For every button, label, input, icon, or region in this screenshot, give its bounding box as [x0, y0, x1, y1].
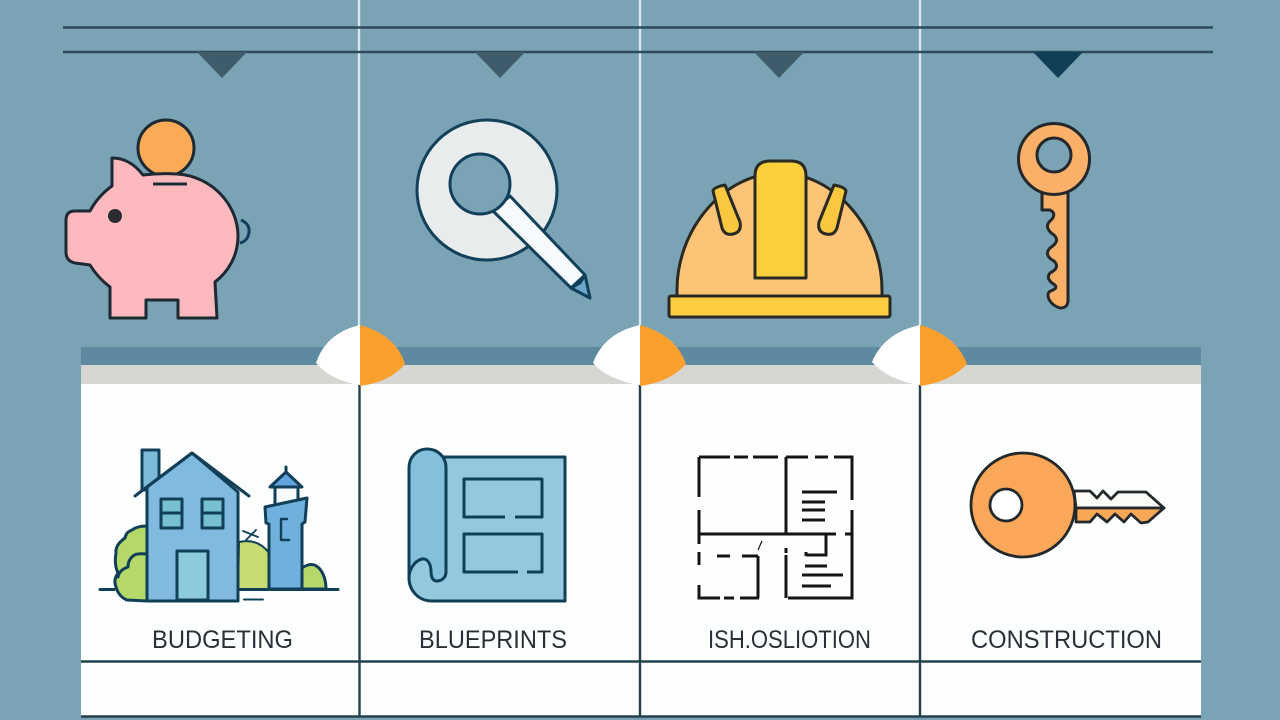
icon: blueprint scroll — [409, 449, 565, 601]
icon: floor plan — [699, 457, 852, 598]
icon: piggy bank — [66, 120, 249, 318]
label: construction: CONSTRUCTION — [971, 626, 1162, 654]
marker triangles — [197, 52, 1083, 78]
connector lens 3 — [872, 325, 967, 386]
label: blueprints: BLUEPRINTS — [419, 626, 567, 654]
panel: white base with header bands — [81, 347, 1201, 716]
connector lens 2 — [593, 325, 686, 386]
icon: horizontal key — [971, 453, 1164, 557]
connector lens 1 — [316, 325, 405, 386]
label: garbled third step: ISH.OSLIOTION — [708, 626, 871, 654]
top rule lines — [63, 28, 1213, 52]
vertical column dividers — [359, 0, 920, 330]
icon: house and tower — [100, 450, 338, 601]
icon: magnifying glass — [417, 120, 590, 298]
label: budgeting: BUDGETING — [152, 626, 293, 654]
icon: vertical key — [1018, 124, 1090, 308]
icon: hard hat — [669, 161, 890, 317]
